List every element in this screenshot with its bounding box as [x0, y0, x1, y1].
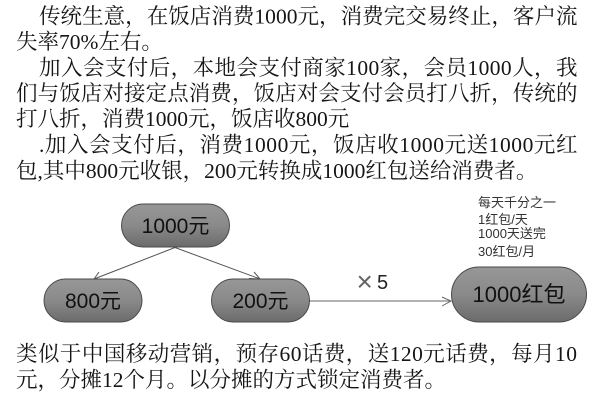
node: 1000 yuan: 1000元: [142, 215, 209, 238]
text block: China Mobile analogy: [16, 342, 577, 393]
text block: after joining, discount: [16, 56, 578, 132]
node: 1000 yuan: [122, 204, 230, 247]
text block: after joining, discount: 加入会支付后，本地会支付商家100家，会员1000人，我: [39, 56, 578, 81]
node: 200 yuan: 200元: [232, 290, 289, 313]
note: red packet schedule: 30红包/月: [478, 244, 535, 259]
text block: after joining, red packets: .加入会支付后，消费1000元，饭店收1000元送1000元红: [39, 133, 578, 158]
text block: after joining, discount: 打八折，消费1000元，饭店收800元: [16, 107, 349, 132]
note: red packet schedule: 每天千分之一: [478, 195, 556, 210]
node: 200 yuan: [212, 279, 310, 322]
text block: China Mobile analogy: 类似于中国移动营销，预存60话费，送120元话费，每月10: [16, 342, 577, 367]
arrow: 200 to red packets: [309, 297, 451, 306]
node: 1000 red packets: [452, 267, 586, 322]
multiplier label: ×: [356, 266, 373, 297]
note: red packet schedule: 1000天送完: [478, 226, 546, 241]
node: 800 yuan: 800元: [65, 290, 121, 313]
note: red packet schedule: [478, 195, 556, 259]
text block: after joining, red packets: [16, 133, 578, 184]
multiplier label: [356, 266, 388, 297]
note: red packet schedule: 1红包/天: [478, 212, 528, 227]
multiplier label: 5: [377, 272, 388, 294]
text block: traditional business: [16, 4, 578, 54]
text block: traditional business: 失率70%左右。: [16, 30, 163, 54]
text block: after joining, discount: 们与饭店对接定点消费，饭店对会支付会员打八折，传统的: [16, 82, 578, 106]
arrow: 1000 to 800: [94, 248, 175, 280]
text block: China Mobile analogy: 元，分摊12个月。以分摊的方式锁定消费者。: [16, 368, 446, 393]
node: 800 yuan: [44, 279, 142, 322]
arrow: 1000 to 200: [175, 248, 260, 279]
node: 1000 red packets: 1000红包: [473, 282, 565, 307]
text block: after joining, red packets: 包,其中800元收银，200元转换成1000红包送给消费者。: [16, 159, 537, 184]
text block: traditional business: 传统生意，在饭店消费1000元，消费完交易终止，客户流: [39, 4, 578, 30]
